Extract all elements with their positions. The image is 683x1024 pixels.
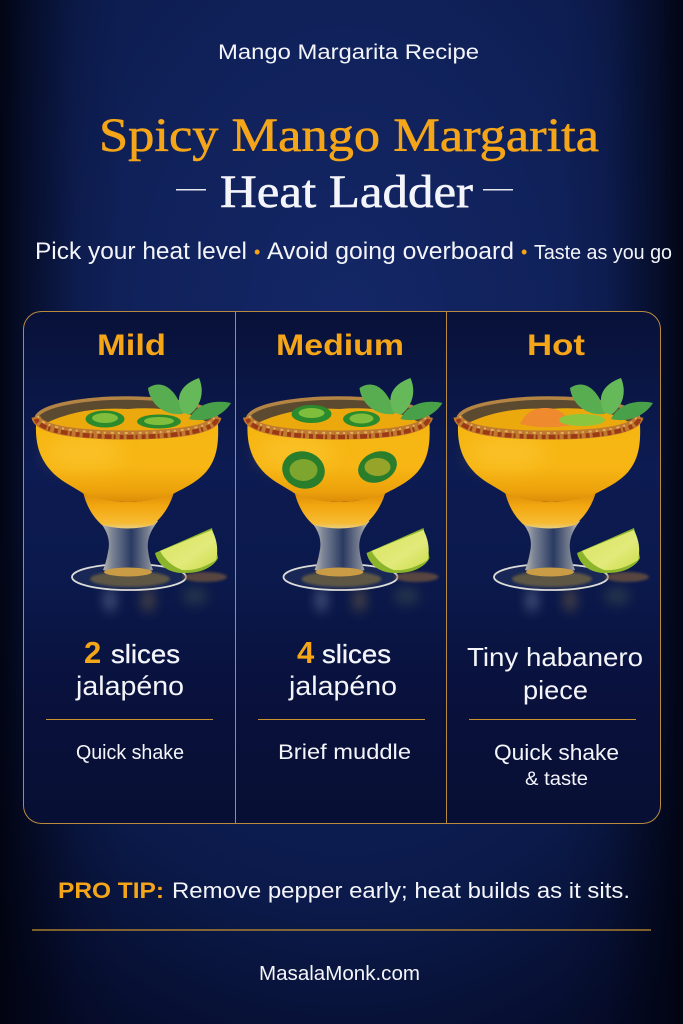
amount: 4 slices jalapeno: 4 [297, 635, 315, 670]
icon: hot margarita glass [458, 378, 653, 612]
icon: medium margarita glass [247, 378, 442, 612]
panel: heat ladder table [24, 312, 660, 824]
title line 2: Heat Ladder [220, 166, 473, 218]
callout: pro tip: PRO TIP: [58, 878, 164, 903]
title [99, 109, 599, 218]
heading: Medium: Medium [276, 329, 404, 362]
tagline [35, 238, 672, 265]
icon: mild margarita glass [36, 378, 231, 612]
method: quick shake and taste [494, 740, 619, 790]
heading: Hot: Hot [527, 329, 585, 362]
tagline: Avoid going overboard [267, 238, 514, 265]
heading: Mild: Mild [97, 329, 166, 362]
method: quick shake and taste: & taste [525, 769, 588, 790]
panel: mild column [36, 329, 231, 764]
amount: tiny habanero piece: piece [523, 675, 588, 705]
method: quick shake and taste: Quick shake [494, 740, 619, 765]
tagline: • [254, 242, 260, 262]
method: quick shake: Quick shake [76, 742, 184, 764]
subtitle: Mango Margarita Recipe: Mango Margarita Recipe [218, 41, 479, 64]
amount: 2 slices jalapeno: jalapéno [75, 671, 184, 701]
amount: 4 slices jalapeno [288, 635, 397, 701]
footer: website: MasalaMonk.com [259, 963, 420, 985]
title line 1: Spicy Mango Margarita [99, 109, 599, 162]
tagline: Pick your heat level [35, 238, 247, 265]
method: brief muddle: Brief muddle [278, 741, 411, 764]
amount: 2 slices jalapeno [75, 635, 184, 701]
callout: pro tip: Remove pepper early; heat builds as it sits. [172, 878, 630, 903]
amount: 2 slices jalapeno: 2 [84, 635, 101, 670]
amount: 4 slices jalapeno: slices [322, 639, 391, 669]
tagline: Taste as you go [534, 242, 672, 264]
tagline: • [521, 242, 527, 262]
amount: tiny habanero piece: Tiny habanero [467, 642, 643, 672]
amount: 4 slices jalapeno: jalapéno [288, 671, 397, 701]
amount: tiny habanero piece [467, 642, 643, 705]
amount: 2 slices jalapeno: slices [111, 639, 180, 669]
panel: hot column [458, 329, 653, 790]
panel: medium column [247, 329, 442, 764]
